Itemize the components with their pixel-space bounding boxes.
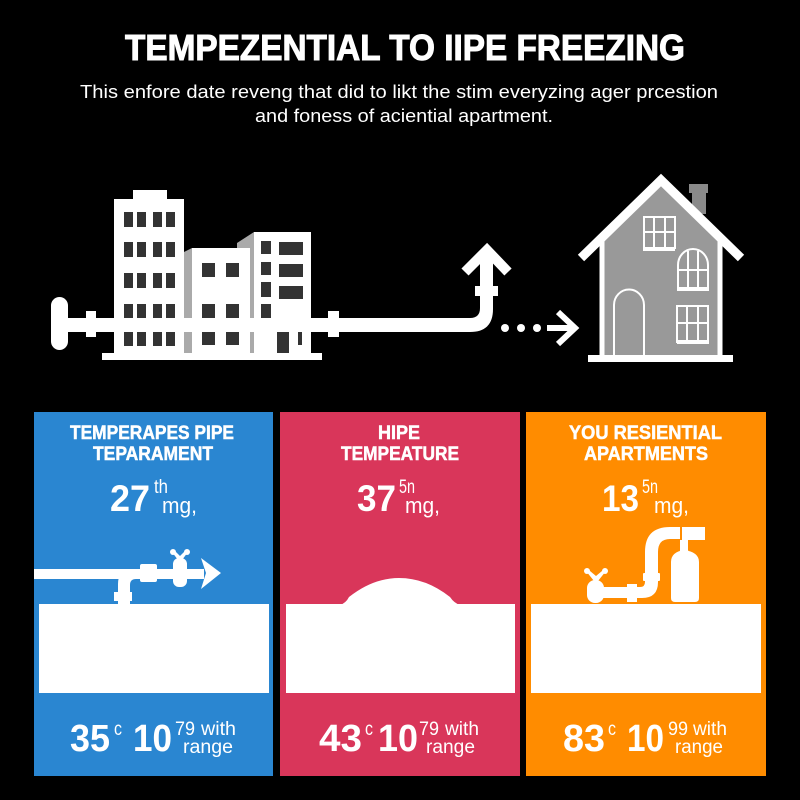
dotted arrow to house <box>501 312 575 344</box>
heading: blue panel <box>70 423 234 465</box>
icon: apartment buildings <box>102 190 322 360</box>
heading: orange panel: APARTMENTS <box>584 444 708 465</box>
white content box: red <box>286 604 515 693</box>
range: orange: 99 <box>668 719 688 740</box>
range: blue: range <box>183 737 233 758</box>
range: orange: 10 <box>627 718 664 760</box>
white content box: orange <box>531 604 761 693</box>
range: red: 79 <box>419 719 439 740</box>
stat: red 37sn mg: 5n <box>399 477 415 498</box>
panel: orange residential apartments <box>526 412 766 776</box>
stat: red 37sn mg: mg, <box>405 493 440 518</box>
subtitle text block <box>80 82 718 126</box>
range: blue: with <box>200 719 236 740</box>
stat: blue 27th mg: th <box>154 477 168 498</box>
icon: house <box>581 180 741 362</box>
panel: red hipe temperature <box>280 412 520 776</box>
stat: blue 27th mg: mg, <box>162 493 197 518</box>
range: orange: c <box>608 719 616 740</box>
range: blue <box>70 718 236 760</box>
heading: orange panel <box>569 423 722 465</box>
range: red: 10 <box>378 718 418 760</box>
range: orange: range <box>675 737 723 758</box>
stat: red 37sn mg: 37 <box>357 478 396 519</box>
range: red <box>319 718 479 760</box>
range: orange: 83 <box>563 718 605 760</box>
illustration: apartment buildings with pipe <box>51 190 508 360</box>
panel: blue pipe temperature <box>34 412 273 776</box>
stat: orange 13sn mg: mg, <box>654 493 689 518</box>
stat: red 37sn mg <box>357 477 440 519</box>
stat: orange 13sn mg: 5n <box>642 477 658 498</box>
range: red: c <box>365 719 373 740</box>
range: orange <box>563 718 727 760</box>
heading: blue panel: TEPARAMENT <box>93 444 213 465</box>
subtitle text block: This enfore date reveng that did to likt the stim everyzing ager prcestion <box>80 82 718 102</box>
icon: long pipe with upward arrow <box>51 250 508 350</box>
heading: red panel <box>341 423 459 465</box>
icon: tap, pipe and tank <box>584 527 705 603</box>
stat: orange 13sn mg <box>602 477 689 519</box>
stat: blue 27th mg: 27 <box>110 478 150 519</box>
range: blue: 10 <box>133 718 172 760</box>
range: blue: 35 <box>70 718 110 760</box>
title: TEMPEZENTIAL TO IIPE FREEZING <box>125 27 685 68</box>
heading: red panel: HIPE <box>378 423 420 444</box>
subtitle text block: and foness of aciential apartment. <box>255 106 553 126</box>
range: red: with <box>444 719 479 740</box>
stat: orange 13sn mg: 13 <box>602 478 639 519</box>
range: red: range <box>426 737 475 758</box>
range: blue: c <box>114 719 122 740</box>
icon: pipe with valve and arrow <box>34 549 221 604</box>
range: orange: with <box>692 719 727 740</box>
stat: blue 27th mg <box>110 477 197 519</box>
heading: orange panel: YOU RESIENTIAL <box>569 423 722 444</box>
heading: red panel: TEMPEATURE <box>341 444 459 465</box>
white content box: blue <box>39 604 269 693</box>
icon: dome <box>340 578 460 605</box>
range: blue: 79 <box>175 719 195 740</box>
range: red: 43 <box>319 718 362 760</box>
heading: blue panel: TEMPERAPES PIPE <box>70 423 234 444</box>
